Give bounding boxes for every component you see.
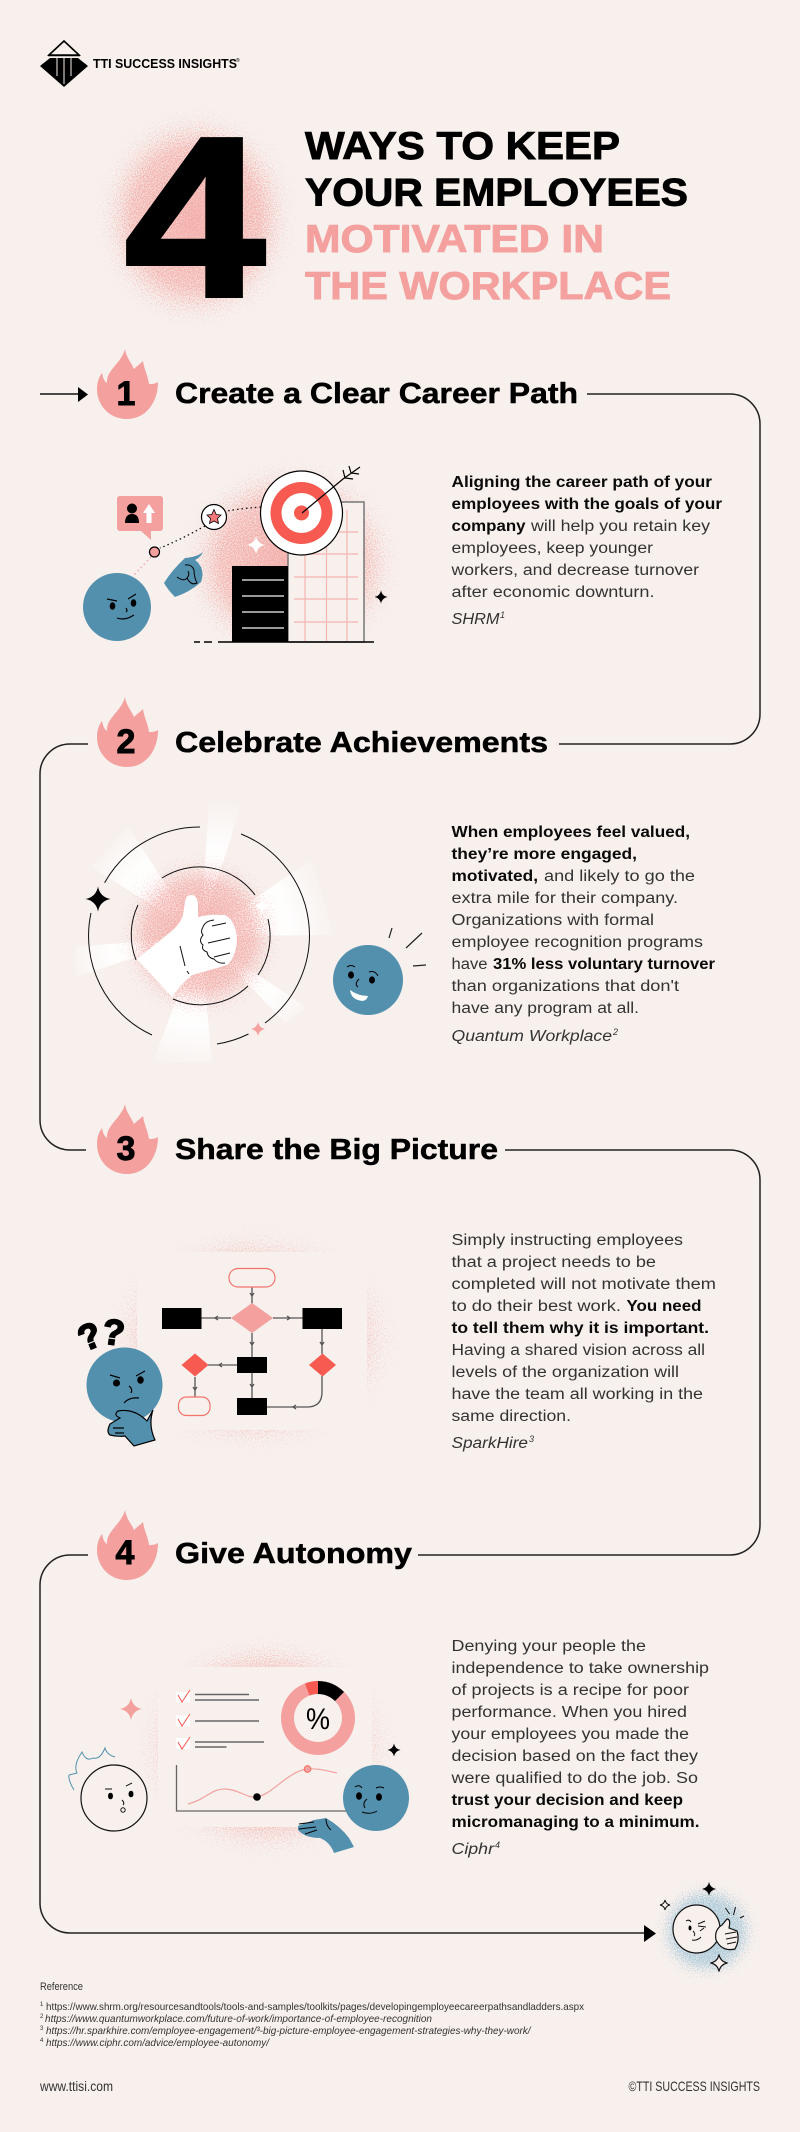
sparkles	[86, 886, 110, 912]
panel	[137, 1252, 367, 1430]
dark building	[232, 566, 288, 642]
section 2 text: and likely to go the	[544, 868, 695, 885]
rings	[89, 827, 309, 1044]
arrow head: end of path	[644, 1925, 656, 1942]
section 2 text: Quantum Workplace	[452, 1028, 612, 1045]
section 2 text: employee recognition programs	[452, 934, 703, 951]
illustration: dashboard	[69, 1605, 430, 1889]
blue face	[83, 573, 151, 641]
section 2 text: When employees feel valued,	[452, 824, 690, 841]
title glow	[68, 78, 324, 358]
section 3 text: Simply instructing employees	[452, 1232, 683, 1249]
flow connectors	[193, 1287, 324, 1409]
speech bubble with person	[117, 496, 163, 540]
section 3 text: Having a shared vision across all	[452, 1342, 705, 1359]
section 2 text: have any program at all.	[452, 1000, 639, 1017]
winking face	[673, 1905, 720, 1953]
illustration: thumbs-up finish	[641, 1867, 773, 1995]
logo: TTI Success Insights	[40, 41, 240, 87]
logo: TTI Success Insights: TTI SUCCESS INSIGHTS	[93, 56, 237, 71]
section 4 text: of projects is a recipe for poor	[452, 1682, 689, 1699]
hand	[298, 1818, 354, 1853]
checklist	[176, 1690, 264, 1749]
references: 4	[40, 2038, 44, 2044]
section 2 heading: Celebrate Achievements	[175, 727, 548, 759]
footer copyright: ©TTI SUCCESS INSIGHTS	[628, 2078, 760, 2094]
references: https://www.ciphr.com/advice/employee-autonomy/	[46, 2037, 270, 2049]
title: WAYS TO KEEP	[305, 125, 620, 168]
illustration: career path target	[83, 450, 410, 643]
section 4 text: performance. When you hired	[452, 1704, 687, 1721]
references: https://hr.sparkhire.com/employee-engagement/³-big-picture-employee-engagement-strategies-why-they-work/	[46, 2025, 532, 2037]
section 3 text: to tell them why it is important.	[452, 1320, 709, 1337]
section 2 text: 2	[612, 1027, 618, 1037]
section 1 heading: Create a Clear Career Path	[175, 378, 578, 410]
section 1 text: employees, keep younger	[452, 540, 653, 557]
title: THE WORKPLACE	[305, 265, 671, 308]
section 3 text: 3	[529, 1434, 534, 1444]
section 1 text: SHRM	[452, 611, 500, 628]
sparkles	[120, 1698, 142, 1720]
title	[305, 125, 688, 308]
footer website: www.ttisi.com	[39, 2078, 113, 2094]
section 4 text: Ciphr	[452, 1841, 495, 1858]
logo: TTI Success Insights: ®	[236, 57, 240, 64]
question marks	[72, 1310, 127, 1359]
section 1 text: company	[452, 518, 526, 535]
section 2 heading	[97, 697, 548, 767]
references	[40, 1981, 585, 2049]
illustration: thumbs up	[76, 802, 426, 1062]
section 4 text: Denying your people the	[452, 1638, 646, 1655]
section 2 text: 31% less voluntary turnover	[493, 956, 715, 973]
references: 2	[40, 2014, 44, 2020]
illustration: flowchart	[68, 1198, 438, 1482]
section 1 text: will help you retain key	[530, 518, 710, 535]
section 2 text: have	[452, 956, 488, 973]
flame badge 2: 2	[117, 723, 135, 761]
thumb	[716, 1919, 738, 1950]
section 3 text	[452, 1232, 716, 1452]
section 4 text: your employees you made the	[452, 1726, 689, 1743]
section 4 text: independence to take ownership	[452, 1660, 709, 1677]
thinking face	[86, 1348, 162, 1446]
blue face	[343, 1765, 409, 1831]
sparkles	[247, 536, 265, 554]
section 4 heading: Give Autonomy	[175, 1538, 412, 1570]
section 1 text: 1	[500, 610, 505, 620]
section 2 text: they’re more engaged,	[452, 846, 637, 863]
section 3 text: SparkHire	[452, 1435, 528, 1452]
section 2 text: than organizations that don't	[452, 978, 680, 995]
sparkles	[702, 1882, 716, 1896]
section 2 text: motivated,	[452, 868, 538, 885]
flame badge 3	[97, 1104, 158, 1174]
flame badge 4: 4	[116, 1534, 135, 1572]
hand	[137, 895, 237, 997]
flame badge 4	[97, 1510, 158, 1580]
line chart	[176, 1765, 347, 1811]
section 4 text	[450, 1638, 709, 1858]
blue face	[333, 928, 426, 1015]
references: 3	[40, 2026, 44, 2032]
flame badge 2	[97, 697, 158, 767]
section 3 text: same direction.	[452, 1408, 571, 1425]
dotted path	[160, 507, 261, 548]
flame badge 1: 1	[117, 375, 135, 413]
section 1 text: employees with the goals of your	[452, 496, 722, 513]
references: 1	[40, 2002, 44, 2008]
question marks: ?	[100, 1310, 127, 1354]
section 3 text: that a project needs to be	[452, 1254, 656, 1271]
glow	[94, 830, 306, 1042]
section 4 text: micromanaging to a minimum.	[452, 1814, 700, 1831]
section 3 text: to do their best work.	[452, 1298, 621, 1315]
section 3 text: levels of the organization will	[452, 1364, 679, 1381]
pink dot	[150, 547, 160, 557]
flame badge 3: 3	[117, 1130, 135, 1168]
section 1 text	[450, 474, 722, 628]
start arrow	[40, 387, 88, 402]
light rays	[76, 802, 334, 1062]
question marks: ?	[72, 1313, 107, 1359]
title: YOUR EMPLOYEES	[305, 172, 688, 214]
section 1 text: workers, and decrease turnover	[450, 562, 699, 579]
section 2 text	[452, 824, 715, 1045]
section 4 heading	[97, 1510, 412, 1580]
target	[260, 466, 360, 555]
title: MOTIVATED IN	[305, 218, 604, 261]
big number 4: 4	[124, 91, 265, 345]
section 3 text: completed will not motivate them	[452, 1276, 716, 1293]
section 2 text: Organizations with formal	[452, 912, 654, 929]
section 3 heading	[97, 1104, 498, 1174]
section 4 text: 4	[495, 1840, 500, 1850]
section 2 text: extra mile for their company.	[452, 890, 678, 907]
pointing hand	[164, 552, 203, 597]
star badge	[202, 504, 226, 530]
references: https://www.quantumworkplace.com/future-of-work/importance-of-employee-recognition	[45, 2013, 432, 2025]
section 4 text: decision based on the fact they	[452, 1748, 698, 1765]
section 4 text: were qualified to do the job. So	[450, 1770, 698, 1787]
outlined face	[69, 1748, 147, 1831]
section 1 heading	[97, 349, 578, 419]
donut chart	[281, 1681, 355, 1755]
section 3 text: You need	[626, 1298, 702, 1315]
tall building	[288, 502, 364, 642]
section 4 text: trust your decision and keep	[452, 1792, 683, 1809]
section 1 text: after economic downturn.	[452, 584, 654, 601]
connector lines	[40, 394, 760, 1933]
references: Reference	[40, 1981, 83, 1993]
section 1 text: Aligning the career path of your	[452, 474, 712, 491]
section 3 heading: Share the Big Picture	[175, 1134, 498, 1166]
section 3 text: have the team all working in the	[452, 1386, 703, 1403]
panel	[158, 1667, 372, 1827]
flow shapes	[162, 1268, 342, 1416]
flame badge 1	[97, 349, 158, 419]
donut chart: %	[306, 1703, 330, 1736]
references: https://www.shrm.org/resourcesandtools/tools-and-samples/toolkits/pages/developingemployeecareerpathsandladders.aspx	[46, 2001, 585, 2013]
